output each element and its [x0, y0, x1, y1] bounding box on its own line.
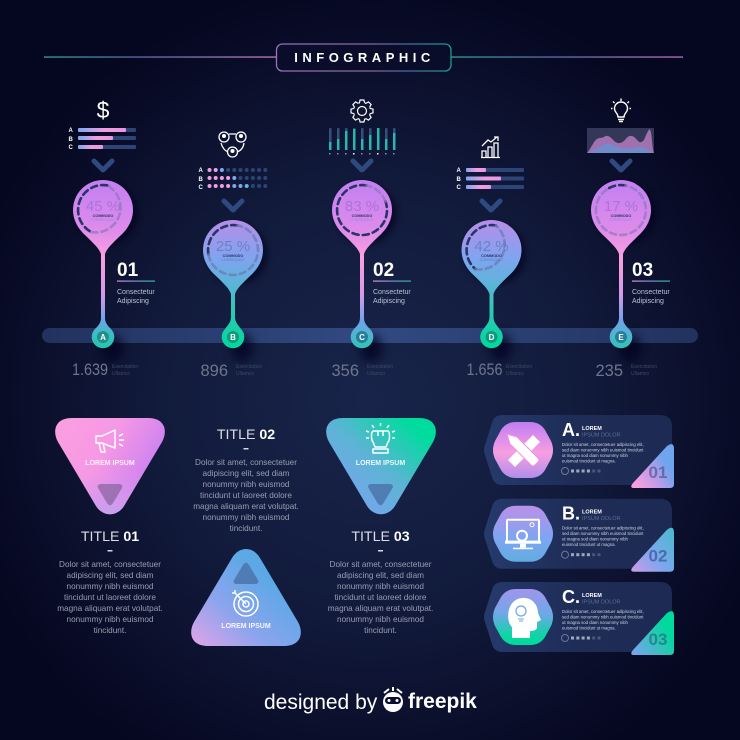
text: title 02: tincidunt. — [230, 524, 262, 533]
text: title 01: tincidunt ut laoreet dolore — [64, 593, 156, 602]
column chart C — [329, 128, 396, 154]
text: title 02: adipiscing elit, sed diam — [203, 469, 290, 478]
text: title 02: tincidunt ut laoreet dolore — [200, 491, 292, 500]
icon: head with bulb — [508, 598, 541, 638]
timeline track — [42, 328, 698, 343]
card B: IPSUM DOLOR — [582, 516, 621, 522]
card A: euismod tincidunt ut magna. — [562, 458, 616, 464]
bar chart D: B — [456, 177, 462, 183]
panel: triangle 01: LOREM IPSUM — [85, 460, 135, 467]
pin C: C — [359, 333, 365, 342]
pin E: 17 % — [604, 198, 638, 215]
value 1.639: Exercitation — [112, 364, 138, 370]
pin C: COMMODO — [352, 214, 372, 218]
card B: ut magna sod diam nonummy nibh — [562, 537, 629, 542]
icon: dollar: $ — [97, 97, 110, 123]
card A: sed diam nonummy nibh euismod tincidunt — [562, 448, 644, 452]
bar chart A — [68, 128, 136, 151]
card B: 02 — [649, 547, 667, 566]
card A: ut magna sod diam nonummy nibh — [562, 453, 629, 458]
label 01: Consectetur — [117, 289, 155, 296]
chevron — [94, 161, 112, 170]
card A: IPSUM DOLOR — [582, 432, 621, 438]
bar chart D — [456, 168, 524, 191]
icon: monitor with gear — [505, 520, 541, 549]
value 1.656: Ullamco — [506, 371, 524, 377]
icon: target — [232, 590, 258, 616]
pin A: A — [100, 333, 106, 342]
card B: euismod tincidunt ut magna. — [562, 542, 616, 547]
pin D: D — [489, 333, 495, 342]
label 03: 03 — [632, 260, 653, 281]
card C: euismod tincidunt ut magna. — [562, 626, 616, 630]
card C — [484, 582, 674, 655]
card B: LOREM — [582, 510, 602, 516]
text: title 03: tincidunt ut laoreet dolore — [335, 593, 427, 602]
value 896: Exercitation — [236, 364, 262, 370]
chevron — [612, 161, 630, 170]
bar chart D: A — [456, 168, 462, 174]
value 356 — [332, 362, 393, 380]
text: title 03: nonummy nibh euismod — [337, 582, 424, 591]
pin A: COMMODO — [93, 214, 113, 218]
pin B: CONSEQUAT — [221, 258, 246, 262]
pin B: B — [230, 333, 236, 342]
card B: sed diam nonummy nibh euismod tincidunt — [562, 531, 644, 536]
area chart E — [587, 128, 654, 153]
text: title 01: nonummy nibh euismod — [67, 582, 154, 591]
card C: Dolor sit amet, consectetuer adipiscing elit, — [562, 609, 644, 614]
label 01: Adipiscing — [117, 298, 149, 305]
label 03: Consectetur — [632, 289, 670, 296]
chevron — [224, 201, 242, 210]
panel: triangle 02 — [191, 549, 301, 646]
card A: Dolor sit amet, consectetuer adipiscing elit, — [562, 442, 644, 447]
value 1.656: 1.656 — [466, 361, 502, 379]
chevron — [482, 201, 500, 210]
footer logo: designed by — [264, 691, 378, 714]
card A: LOREM — [582, 426, 602, 432]
value 356: 356 — [332, 362, 359, 380]
text: title 03: nonummy nibh euismod — [337, 615, 424, 624]
pin E: COMMODO — [611, 214, 631, 218]
value 235: 235 — [596, 362, 623, 380]
value 1.639: Ullamco — [112, 371, 130, 377]
text: title 03 — [328, 529, 433, 635]
card C: 03 — [649, 630, 667, 649]
value 356: Ullamco — [367, 371, 385, 377]
text: title 03: magna aliquam erat volutpat. — [328, 604, 433, 613]
pin B: 25 % — [216, 238, 250, 255]
card A: A. — [562, 420, 580, 440]
text: title 01: TITLE 01 — [81, 529, 139, 545]
text: title 02: TITLE 02 — [217, 427, 275, 443]
pin A — [73, 180, 138, 362]
panel: triangle 02: LOREM IPSUM — [221, 623, 271, 630]
label 02: 02 — [373, 260, 394, 281]
pin A: CONSEQUAT — [91, 218, 116, 222]
pin B: COMMODO — [223, 254, 243, 258]
footer logo: freepik — [408, 690, 477, 713]
text: title 02: nonummy nibh euismod — [203, 513, 290, 522]
value 1.656 — [466, 361, 532, 379]
chevron — [353, 161, 371, 170]
icon: network — [219, 132, 246, 157]
value 896: Ullamco — [236, 371, 254, 377]
label 03 — [632, 260, 670, 305]
value 235: Ullamco — [631, 371, 649, 377]
text: title 01: adipiscing elit, sed diam — [67, 571, 154, 580]
label 02: Adipiscing — [373, 298, 405, 305]
panel: triangle 03: LOREM IPSUM — [356, 460, 405, 467]
label 01: 01 — [117, 260, 139, 281]
icon: megaphone — [96, 430, 124, 452]
card C: sed diam nonummy nibh euismod tincidunt — [562, 614, 644, 620]
pin C — [332, 180, 397, 362]
value 235 — [596, 362, 657, 380]
card C: ut magna sod diam nonummy nibh — [562, 620, 629, 625]
card B — [484, 499, 674, 572]
text: title 01: magna aliquam erat volutpat. — [57, 604, 163, 613]
icon: pencil and ruler — [507, 434, 540, 467]
icon: growth chart — [481, 137, 500, 158]
footer logo — [264, 687, 477, 714]
value 235: Exercitation — [631, 364, 657, 370]
column D — [456, 137, 532, 379]
pin C: 83 % — [345, 198, 379, 215]
text: title 02: nonummy nibh euismod — [203, 480, 290, 489]
pin D: CONSEQUAT — [480, 258, 504, 262]
value 896 — [200, 362, 262, 380]
pin D — [462, 220, 526, 361]
value 1.656: Exercitation — [506, 364, 532, 370]
card C: C. — [562, 587, 580, 607]
icon: raised fist — [366, 423, 395, 453]
text: title 02: magna aliquam erat volutpat. — [193, 502, 299, 511]
panel: triangle 03 — [326, 418, 436, 514]
card A — [484, 415, 674, 488]
dot chart B: B — [198, 177, 204, 183]
pin B — [203, 220, 268, 361]
bar chart A: B — [68, 137, 74, 143]
column A — [68, 97, 155, 379]
text: title 01 — [57, 529, 163, 635]
pin E: E — [618, 333, 624, 342]
pin E — [591, 180, 656, 362]
icon: light bulb — [611, 98, 631, 122]
label 03: Adipiscing — [632, 298, 664, 305]
pin D: COMMODO — [481, 254, 502, 258]
card C: IPSUM DOLOR — [582, 600, 621, 606]
card B: B. — [562, 504, 580, 524]
dot chart B: C — [198, 185, 204, 191]
text: title 03: tincidunt. — [364, 626, 397, 635]
label 01 — [117, 260, 155, 305]
bar chart A: A — [68, 128, 74, 134]
icon: gear — [351, 100, 373, 122]
value 896: 896 — [200, 362, 228, 380]
text: title 02: Dolor sit amet, consectetuer — [195, 458, 297, 467]
text: title 03: Dolor sit amet, consectetuer — [330, 560, 432, 569]
value 356: Exercitation — [367, 364, 393, 370]
bar chart A: C — [68, 145, 74, 151]
icon: freepik mascot — [383, 687, 403, 712]
dot chart B — [198, 168, 267, 191]
column C — [329, 100, 411, 380]
card B: Dolor sit amet, consectetuer adipiscing elit, — [562, 526, 644, 531]
text: title 01: tincidunt. — [94, 626, 126, 635]
text: title 03: TITLE 03 — [351, 529, 410, 545]
column E — [587, 98, 670, 380]
text: title 01: nonummy nibh euismod — [67, 615, 154, 624]
card A: 01 — [649, 463, 667, 482]
text: title 01: Dolor sit amet, consectetuer — [59, 560, 161, 569]
column B — [198, 132, 268, 380]
label 02 — [373, 260, 411, 305]
pin C: CONSEQUAT — [350, 218, 375, 222]
bar chart D: C — [456, 185, 462, 191]
label 02: Consectetur — [373, 289, 411, 296]
value 1.639: 1.639 — [72, 361, 108, 379]
pin D: 42 % — [474, 238, 509, 255]
value 1.639 — [72, 361, 138, 379]
card C: LOREM — [582, 593, 602, 599]
dot chart B: A — [198, 168, 204, 174]
pin A: 45 % — [86, 198, 120, 215]
panel: triangle 01 — [55, 418, 165, 514]
title banner — [44, 44, 683, 71]
title banner: INFOGRAPHIC — [294, 50, 435, 65]
text: title 02 — [193, 427, 299, 533]
text: title 03: adipiscing elit, sed diam — [337, 571, 424, 580]
pin E: CONSEQUAT — [609, 218, 634, 222]
